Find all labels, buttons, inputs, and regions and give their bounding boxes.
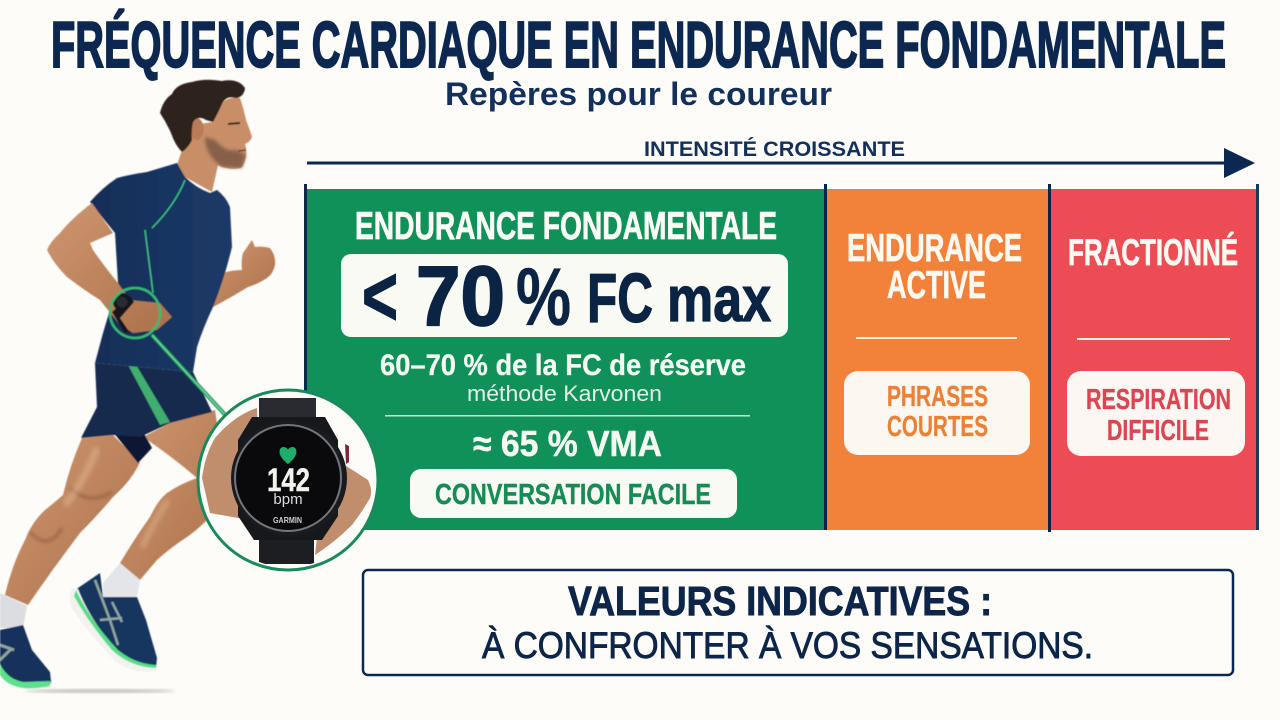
- value box: moins de 70 % FC max: [341, 249, 788, 343]
- neck and face: [177, 97, 252, 192]
- pill: respiration difficile: [1067, 371, 1245, 456]
- pill: phrases courtes: PHRASES: [887, 381, 988, 413]
- value box: moins de 70 % FC max: %: [516, 252, 571, 343]
- watch zoom circle: GARMIN: [273, 516, 302, 525]
- arrow: intensité croissante: INTENSITÉ CROISSANTE: [644, 138, 905, 161]
- small wrist watch: [112, 293, 134, 333]
- callout: valeurs indicatives: [363, 570, 1233, 675]
- watch case: [231, 420, 347, 536]
- value box: moins de 70 % FC max: <: [362, 249, 398, 343]
- heading: endurance active: [847, 227, 1022, 307]
- shorts: [81, 363, 212, 463]
- green ring and connector: [110, 288, 228, 418]
- pill: phrases courtes: COURTES: [887, 411, 988, 443]
- panel: endurance fondamentale: [307, 189, 826, 530]
- heart: [280, 447, 296, 464]
- runner: [0, 80, 275, 693]
- value box: moins de 70 % FC max: max: [667, 263, 771, 335]
- pill: respiration difficile: RESPIRATION: [1086, 384, 1231, 416]
- rear leg: [0, 435, 140, 688]
- pill: conversation facile: CONVERSATION FACILE: [435, 479, 711, 511]
- pill: conversation facile: [410, 469, 737, 518]
- watch strap: [259, 398, 316, 417]
- back arm: [47, 203, 172, 333]
- subtitle: Repères pour le coureur: [445, 76, 832, 112]
- pill: phrases courtes: [844, 371, 1030, 455]
- panel: fractionné: [1050, 189, 1257, 530]
- heart rate text: 142: [267, 462, 310, 498]
- watch zoom circle: [198, 390, 378, 570]
- pill: respiration difficile: DIFFICILE: [1107, 415, 1209, 447]
- skin behind watch: [202, 408, 258, 518]
- hair: [160, 80, 245, 152]
- text: FC de réserve: 60–70 % de la FC de réserve: [380, 349, 746, 382]
- shirt: [90, 163, 232, 372]
- front leg: [70, 410, 228, 672]
- heading: endurance active: ENDURANCE: [847, 227, 1022, 270]
- callout: valeurs indicatives: À CONFRONTER À VOS SENSATIONS.: [482, 625, 1093, 666]
- heading: endurance active: ACTIVE: [887, 264, 986, 307]
- arrow: intensité croissante: [307, 138, 1255, 178]
- watch zoom circle: bpm: [273, 491, 303, 508]
- front arm: [205, 240, 275, 307]
- watch lugs: [238, 417, 338, 540]
- callout: valeurs indicatives: VALEURS INDICATIVES :: [568, 578, 992, 624]
- text: 65 % VMA: ≈ 65 % VMA: [473, 423, 662, 464]
- value box: moins de 70 % FC max: 70: [416, 249, 505, 343]
- heading: endurance fondamentale: ENDURANCE FONDAMENTALE: [355, 205, 777, 248]
- shadow: [25, 689, 175, 693]
- text: méthode Karvonen: méthode Karvonen: [467, 381, 662, 406]
- panel: endurance active: [826, 189, 1049, 530]
- value box: moins de 70 % FC max: FC: [587, 259, 653, 337]
